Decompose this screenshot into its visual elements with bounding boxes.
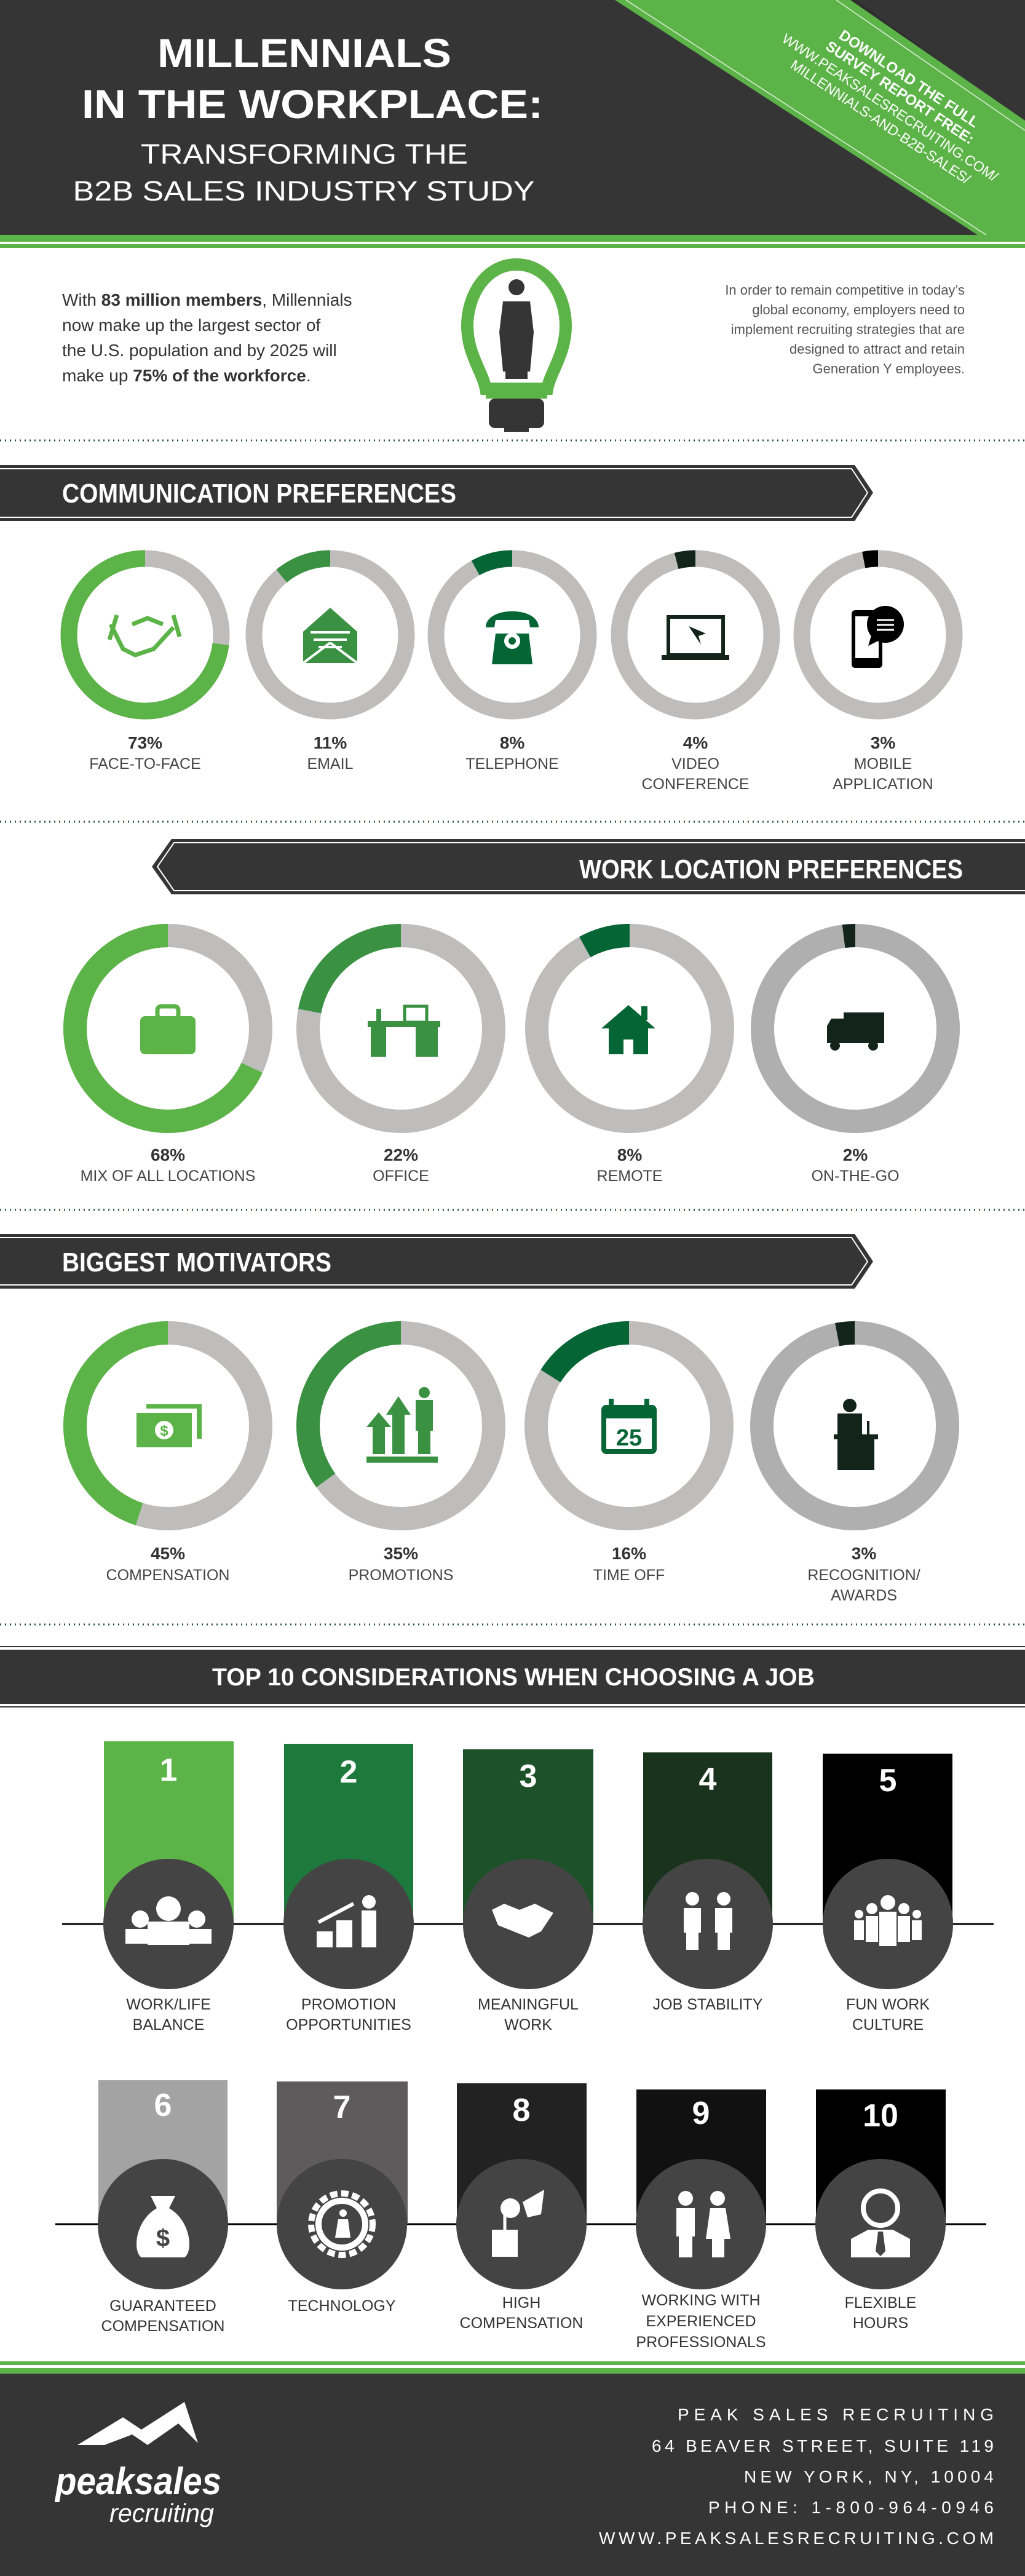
footer logo: peaksales (54, 2460, 221, 2503)
item 6: guaranteed compensation: $ (156, 2225, 170, 2252)
item 1: work/life balance: WORK/LIFE (126, 1996, 211, 2013)
chart: comm ring email 11%: EMAIL (307, 755, 354, 773)
footer contact text: WWW.PEAKSALESRECRUITING.COM (599, 2529, 997, 2548)
download ribbon: MILLENNIALS-AND-B2B-SALES/ (788, 57, 974, 187)
chart: motivator ring compensation 45% (75, 1333, 261, 1584)
item 2: promotion opportunities: OPPORTUNITIES (286, 2016, 411, 2033)
intro right text: Generation Y employees. (813, 361, 965, 376)
chart: comm ring video conference 4% (619, 559, 772, 793)
chart: motivator ring compensation 45%: COMPENSATION (106, 1567, 229, 1584)
banner: communication preferences (0, 465, 873, 521)
item 9: working with experienced professionals: EXPERIENCED (646, 2313, 756, 2330)
item 4: job stability: 4 (699, 1762, 717, 1797)
chart: work ring remote 8% (537, 936, 722, 1185)
item 7: technology: TECHNOLOGY (288, 2297, 396, 2315)
footer contact text: 64 BEAVER STREET, SUITE 119 (652, 2436, 997, 2455)
chart: comm ring email 11% (254, 559, 406, 773)
title: TRANSFORMING THE (141, 138, 468, 170)
footer logo (54, 2402, 221, 2527)
chart: comm ring mobile application 3%: 3% (871, 733, 895, 752)
chart: comm ring face-to-face 73%: 73% (128, 733, 162, 752)
footer (0, 2361, 1025, 2576)
chart: work ring on-the-go 2% (762, 936, 948, 1185)
chart: motivator ring recognition 3% (762, 1333, 948, 1604)
item 2: promotion opportunities (283, 1744, 414, 2033)
chart: motivator ring time off 16%: TIME OFF (593, 1567, 665, 1584)
item 7: technology: 7 (333, 2089, 350, 2125)
chart: motivator ring time off 16%: 16% (612, 1544, 646, 1563)
chart: motivator ring promotions 35%: PROMOTIONS (349, 1567, 453, 1584)
chart: work ring mix 68%: 68% (151, 1145, 185, 1164)
chart: work ring office 22%: OFFICE (373, 1167, 429, 1185)
title: IN THE WORKPLACE: (82, 81, 543, 127)
title: MILLENNIALS (157, 30, 451, 76)
chart: comm ring telephone 8% (436, 559, 588, 773)
item 8: high compensation (456, 2083, 587, 2332)
item 9: working with experienced professionals: WORKING WITH (641, 2292, 761, 2309)
chart: work ring office 22%: 22% (384, 1145, 418, 1164)
item 3: meaningful work: 3 (520, 1759, 537, 1794)
item 5: fun work culture: FUN WORK (846, 1996, 930, 2013)
item 4: job stability (643, 1752, 773, 2013)
chart: motivator ring recognition 3%: 3% (852, 1544, 876, 1563)
chart: comm ring mobile application 3%: APPLICATION (833, 776, 933, 793)
item 5: fun work culture: CULTURE (852, 2016, 924, 2033)
intro right text (725, 282, 965, 376)
download ribbon (615, 0, 1025, 235)
intro left text (62, 290, 352, 385)
item 3: meaningful work (463, 1749, 593, 2033)
item 5: fun work culture: 5 (879, 1763, 896, 1799)
chart: motivator ring promotions 35%: 35% (384, 1544, 418, 1563)
footer logo: recruiting (109, 2498, 214, 2527)
item 1: work/life balance (103, 1741, 234, 2033)
banner: top 10 considerations (0, 1647, 1025, 1707)
chart: work ring mix 68%: MIX OF ALL LOCATIONS (81, 1167, 255, 1185)
chart: comm ring telephone 8%: TELEPHONE (465, 755, 559, 773)
chart: comm ring email 11%: 11% (314, 733, 347, 752)
banner: communication preferences: COMMUNICATION PREFERENCES (62, 479, 456, 509)
header background (0, 0, 1025, 248)
title: B2B SALES INDUSTRY STUDY (73, 175, 535, 207)
item 6: guaranteed compensation: GUARANTEED (109, 2297, 216, 2315)
item 3: meaningful work: MEANINGFUL (478, 1996, 579, 2013)
item 8: high compensation: COMPENSATION (460, 2315, 583, 2332)
chart: comm ring mobile application 3% (802, 559, 954, 793)
chart: work ring remote 8%: 8% (617, 1145, 642, 1164)
banner: biggest motivators (0, 1234, 873, 1289)
chart: work ring remote 8%: REMOTE (597, 1167, 662, 1185)
chart: comm ring mobile application 3%: MOBILE (854, 755, 912, 773)
download ribbon: DOWNLOAD THE FULL (836, 27, 982, 131)
banner: top 10 considerations: TOP 10 CONSIDERATIONS WHEN CHOOSING A JOB (212, 1664, 815, 1691)
item 10: flexible hours (815, 2089, 946, 2332)
intro right text: implement recruiting strategies that are (731, 322, 965, 337)
footer contact text (599, 2405, 997, 2548)
banner: work location preferences: WORK LOCATION PREFERENCES (579, 854, 963, 885)
intro right text: designed to attract and retain (790, 341, 965, 357)
item 6: guaranteed compensation: 6 (154, 2088, 172, 2123)
item 4: job stability: JOB STABILITY (653, 1996, 763, 2013)
banner: biggest motivators: BIGGEST MOTIVATORS (62, 1247, 331, 1278)
download ribbon: SURVEY REPORT FREE: (823, 38, 977, 148)
intro right text: In order to remain competitive in today’s (725, 282, 965, 298)
title (73, 30, 543, 207)
item 8: high compensation: HIGH (502, 2294, 540, 2312)
chart: comm ring video conference 4%: CONFERENCE (641, 776, 750, 793)
item 2: promotion opportunities: PROMOTION (301, 1996, 396, 2013)
item 8: high compensation: 8 (513, 2093, 530, 2128)
item 10: flexible hours: FLEXIBLE (845, 2294, 916, 2312)
item 1: work/life balance: BALANCE (133, 2016, 204, 2033)
item 6: guaranteed compensation (98, 2080, 228, 2335)
banner: work location preferences (152, 839, 1025, 894)
item 2: promotion opportunities: 2 (340, 1754, 357, 1790)
item 6: guaranteed compensation: COMPENSATION (101, 2318, 224, 2335)
item 3: meaningful work: WORK (504, 2016, 552, 2033)
chart: comm ring video conference 4%: 4% (683, 733, 708, 752)
footer contact text: PHONE: 1-800-964-0946 (708, 2498, 997, 2517)
icon: lightbulb with person (467, 264, 566, 432)
chart: comm ring face-to-face 73% (69, 559, 221, 773)
chart: motivator ring time off 16%: 25 (616, 1425, 642, 1451)
intro right text: global economy, employers need to (752, 302, 965, 317)
intro left text: the U.S. population and by 2025 will (62, 341, 337, 360)
item 5: fun work culture (823, 1754, 953, 2033)
item 7: technology (277, 2081, 408, 2315)
intro left text: now make up the largest sector of (62, 316, 320, 335)
item 9: working with experienced professionals: 9 (692, 2096, 710, 2131)
chart: motivator ring recognition 3%: RECOGNITION/ (807, 1567, 920, 1584)
chart: work ring office 22% (308, 936, 494, 1185)
footer contact text: PEAK SALES RECRUITING (678, 2405, 997, 2424)
chart: work ring mix 68% (75, 936, 261, 1185)
chart: comm ring face-to-face 73%: FACE-TO-FACE (89, 755, 201, 773)
intro left text: With 83 million members, Millennials (62, 290, 352, 309)
item 10: flexible hours: HOURS (853, 2315, 908, 2332)
item 9: working with experienced professionals (636, 2089, 766, 2351)
download ribbon: WWW.PEAKSALESRECRUITING.COM/ (779, 30, 1001, 185)
item 9: working with experienced professionals: PROFESSIONALS (636, 2334, 766, 2351)
chart: motivator ring compensation 45%: $ (160, 1423, 168, 1439)
chart: work ring on-the-go 2%: 2% (843, 1145, 868, 1164)
footer contact text: NEW YORK, NY, 10004 (744, 2467, 997, 2486)
item 10: flexible hours: 10 (863, 2098, 898, 2134)
chart: motivator ring recognition 3%: AWARDS (831, 1587, 897, 1604)
chart: work ring on-the-go 2%: ON-THE-GO (811, 1167, 900, 1185)
intro left text: make up 75% of the workforce. (62, 366, 311, 385)
chart: comm ring telephone 8%: 8% (500, 733, 524, 752)
chart: motivator ring time off 16% (536, 1333, 722, 1584)
chart: comm ring video conference 4%: VIDEO (671, 755, 719, 773)
item 1: work/life balance: 1 (160, 1752, 177, 1788)
chart: motivator ring compensation 45%: 45% (151, 1544, 185, 1563)
chart: motivator ring promotions 35% (308, 1333, 494, 1584)
